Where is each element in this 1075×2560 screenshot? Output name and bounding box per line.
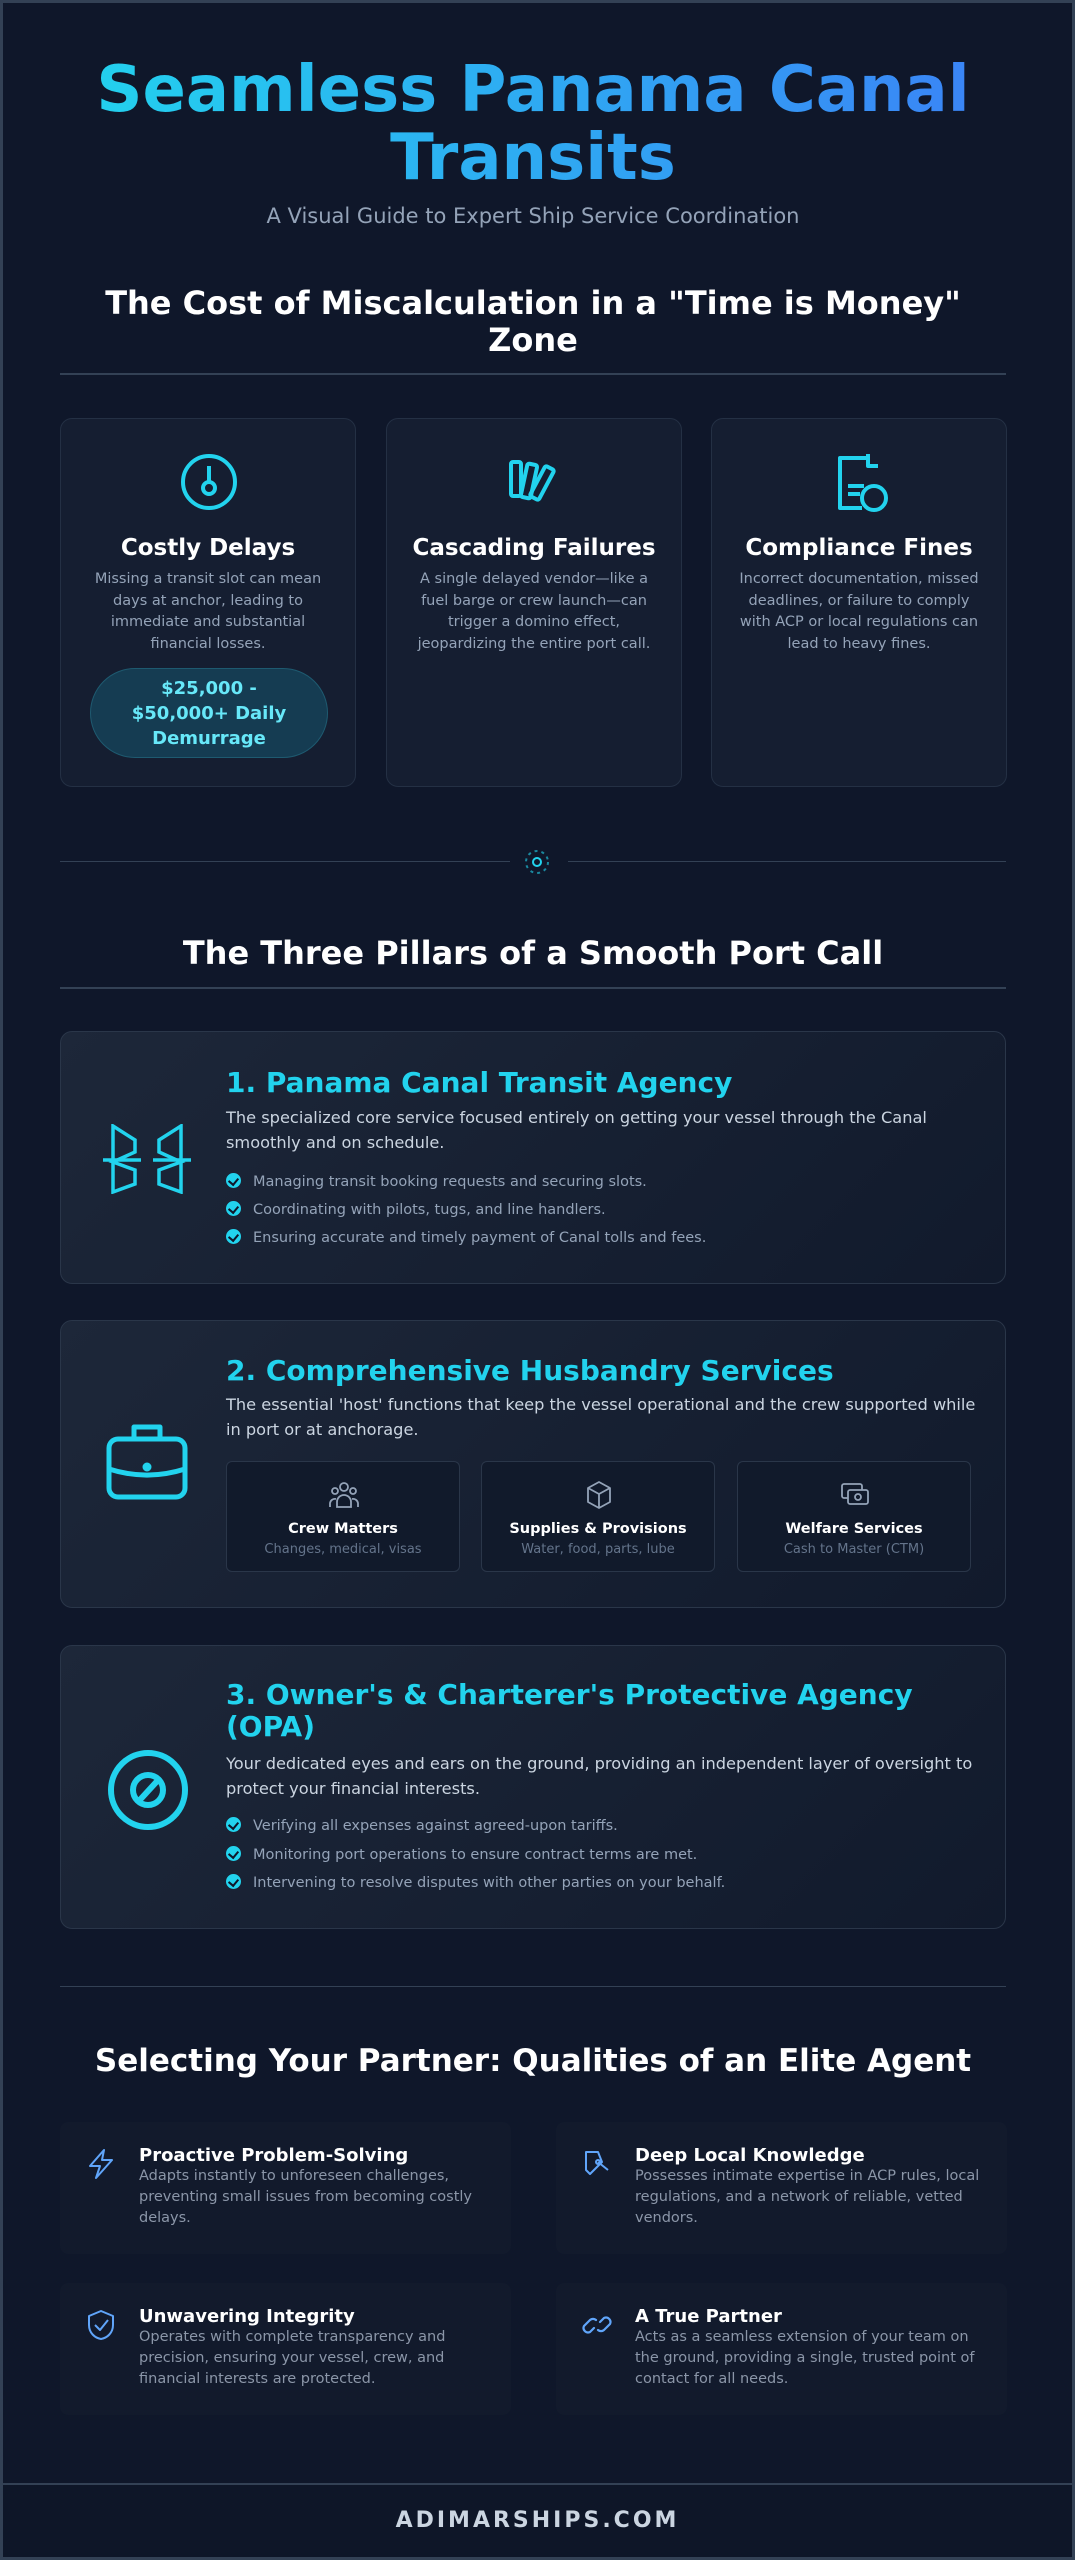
sub-card: crew: Crew Matters [288, 1521, 398, 1537]
panel: pillar 1: The specialized core service focused entirely on getting your vessel through the Canal smoothly and on schedule. [226, 1108, 927, 1152]
icon: separator [525, 850, 549, 874]
sub-card: welfare: Cash to Master (CTM) [784, 1542, 924, 1557]
panel: compliance fines: Compliance Fines [745, 535, 973, 561]
panel: pillar 2: The essential 'host' functions that keep the vessel operational and the crew supported while in port or at anchorage. [226, 1395, 975, 1439]
panel: pillar 2 [60, 1320, 1006, 1608]
icon: document fine [838, 454, 888, 512]
panel: costly delays: Costly Delays [121, 535, 295, 561]
quality: integrity: Operates with complete transparency and precision, ensuring your vessel, crew, and financial interests are protected. [139, 2329, 445, 2387]
quality: proactive [60, 2122, 511, 2254]
callout: demurrage: $25,000 - [161, 678, 257, 699]
subtitle: A Visual Guide to Expert Ship Service Coordination [267, 204, 799, 228]
panel: pillar 1: Ensuring accurate and timely payment of Canal tolls and fees. [253, 1230, 706, 1246]
sub-card: crew: Changes, medical, visas [264, 1542, 422, 1557]
quality: true partner [556, 2283, 1007, 2415]
callout: demurrage: $50,000+ Daily [132, 703, 286, 724]
quality: integrity: Unwavering Integrity [139, 2306, 355, 2327]
sub-card: welfare [737, 1461, 971, 1572]
panel: pillar 2: 2. Comprehensive Husbandry Services [226, 1354, 834, 1387]
quality: true partner: Acts as a seamless extension of your team on the ground, providing a single, trusted point of contact for all needs. [635, 2329, 975, 2387]
panel: compliance fines: Incorrect documentation, missed deadlines, or failure to comply with ACP or local regulations can lead to heavy fines. [739, 571, 979, 652]
quality: true partner: A True Partner [635, 2306, 782, 2327]
panel: cascading failures: A single delayed vendor—like a fuel barge or crew launch—can trigger a domino effect, jeopardizing the entire port call. [418, 571, 650, 652]
panel: pillar 1: Coordinating with pilots, tugs, and line handlers. [253, 1202, 606, 1218]
panel: cascading failures [386, 418, 682, 787]
icon: briefcase [106, 1424, 188, 1500]
panel: pillar 3 [60, 1645, 1006, 1929]
panel: pillar 1 [60, 1031, 1006, 1284]
heading: selecting partner: Selecting Your Partner: Qualities of an Elite Agent [95, 2043, 971, 2079]
quality: integrity [60, 2283, 511, 2415]
callout: demurrage [90, 668, 328, 758]
callout: demurrage: Demurrage [152, 728, 266, 749]
panel: pillar 3: Monitoring port operations to ensure contract terms are met. [253, 1847, 697, 1863]
panel: costly delays [60, 418, 356, 787]
quality: local knowledge [556, 2122, 1007, 2254]
sub-card: crew [226, 1461, 460, 1572]
panel: cascading failures: Cascading Failures [412, 535, 656, 561]
icon: dominoes [509, 460, 556, 502]
sub-card: welfare: Welfare Services [785, 1521, 923, 1537]
panel: costly delays: Missing a transit slot can mean days at anchor, leading to immediate and substantial financial losses. [95, 571, 321, 652]
quality: local knowledge: Deep Local Knowledge [635, 2145, 865, 2166]
panel: pillar 1: 1. Panama Canal Transit Agency [226, 1066, 732, 1099]
panel: pillar 3: Your dedicated eyes and ears on the ground, providing an independent layer of oversight to protect your financial interests. [226, 1754, 972, 1798]
panel: pillar 1: Managing transit booking requests and securing slots. [253, 1174, 647, 1190]
quality: proactive: Adapts instantly to unforeseen challenges, preventing small issues from becoming costly delays. [139, 2168, 472, 2226]
heading: three pillars: The Three Pillars of a Smooth Port Call [183, 934, 883, 972]
panel: compliance fines [711, 418, 1007, 787]
sub-card: supplies: Supplies & Provisions [509, 1521, 687, 1537]
icon: canal locks [103, 1124, 191, 1194]
title: Seamless Panama Canal Transits [96, 53, 970, 195]
quality: local knowledge: Possesses intimate expertise in ACP rules, local regulations, and a network of reliable, vetted vendors. [635, 2168, 979, 2226]
panel: pillar 3: Intervening to resolve disputes with other parties on your behalf. [253, 1875, 725, 1891]
sub-card: supplies: Water, food, parts, lube [521, 1542, 675, 1557]
heading: cost of miscalculation: The Cost of Miscalculation in a "Time is Money" Zone [105, 284, 961, 359]
panel: pillar 3: Verifying all expenses against agreed-upon tariffs. [253, 1818, 618, 1834]
panel: pillar 3: 3. Owner's & Charterer's Protective Agency (OPA) [226, 1678, 913, 1743]
footer: ADIMARSHIPS.COM [396, 2508, 679, 2533]
footer [3, 2485, 1072, 2557]
sub-card: supplies [481, 1461, 715, 1572]
icon: clock [181, 454, 237, 510]
quality: proactive: Proactive Problem-Solving [139, 2145, 408, 2166]
icon: target shield [108, 1750, 188, 1830]
